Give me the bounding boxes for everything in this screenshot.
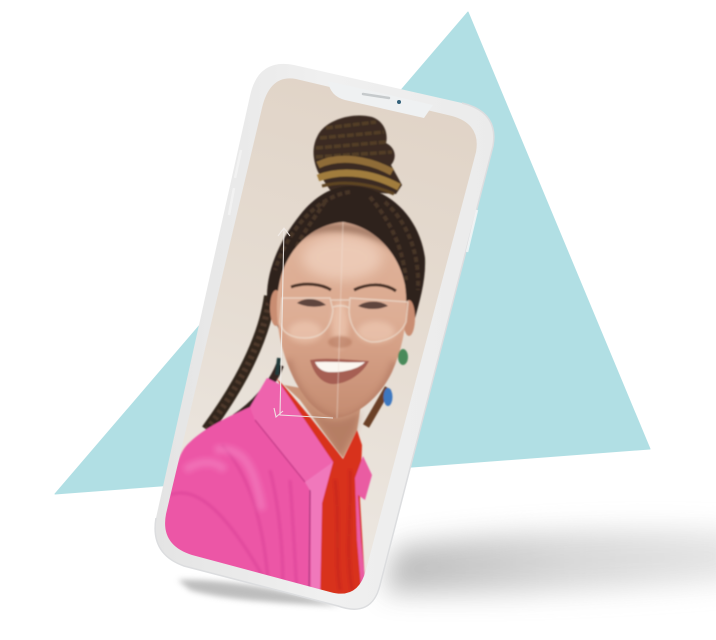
notch <box>328 81 433 118</box>
background triangle <box>55 12 650 494</box>
face <box>270 222 415 420</box>
phone screen <box>165 78 477 594</box>
pink shirt <box>164 378 372 600</box>
back braid left <box>207 296 280 430</box>
person <box>164 116 425 600</box>
neck <box>284 385 364 458</box>
hair on head <box>267 186 425 330</box>
glasses <box>280 298 408 342</box>
face mesh lines <box>337 222 343 418</box>
nose <box>328 336 352 348</box>
eyes <box>297 299 326 307</box>
scan arrows <box>274 228 333 418</box>
camera <box>397 100 401 104</box>
hair bun <box>314 116 402 194</box>
right ear <box>403 300 415 336</box>
left ear <box>270 290 282 326</box>
eyebrows <box>291 284 331 290</box>
forehead highlight <box>302 236 382 280</box>
red top <box>276 378 366 600</box>
earrings <box>277 349 408 426</box>
phone shadow <box>178 530 716 606</box>
speaker <box>363 94 389 98</box>
mouth <box>310 359 369 384</box>
side buttons <box>229 150 241 215</box>
phone body <box>155 64 494 609</box>
